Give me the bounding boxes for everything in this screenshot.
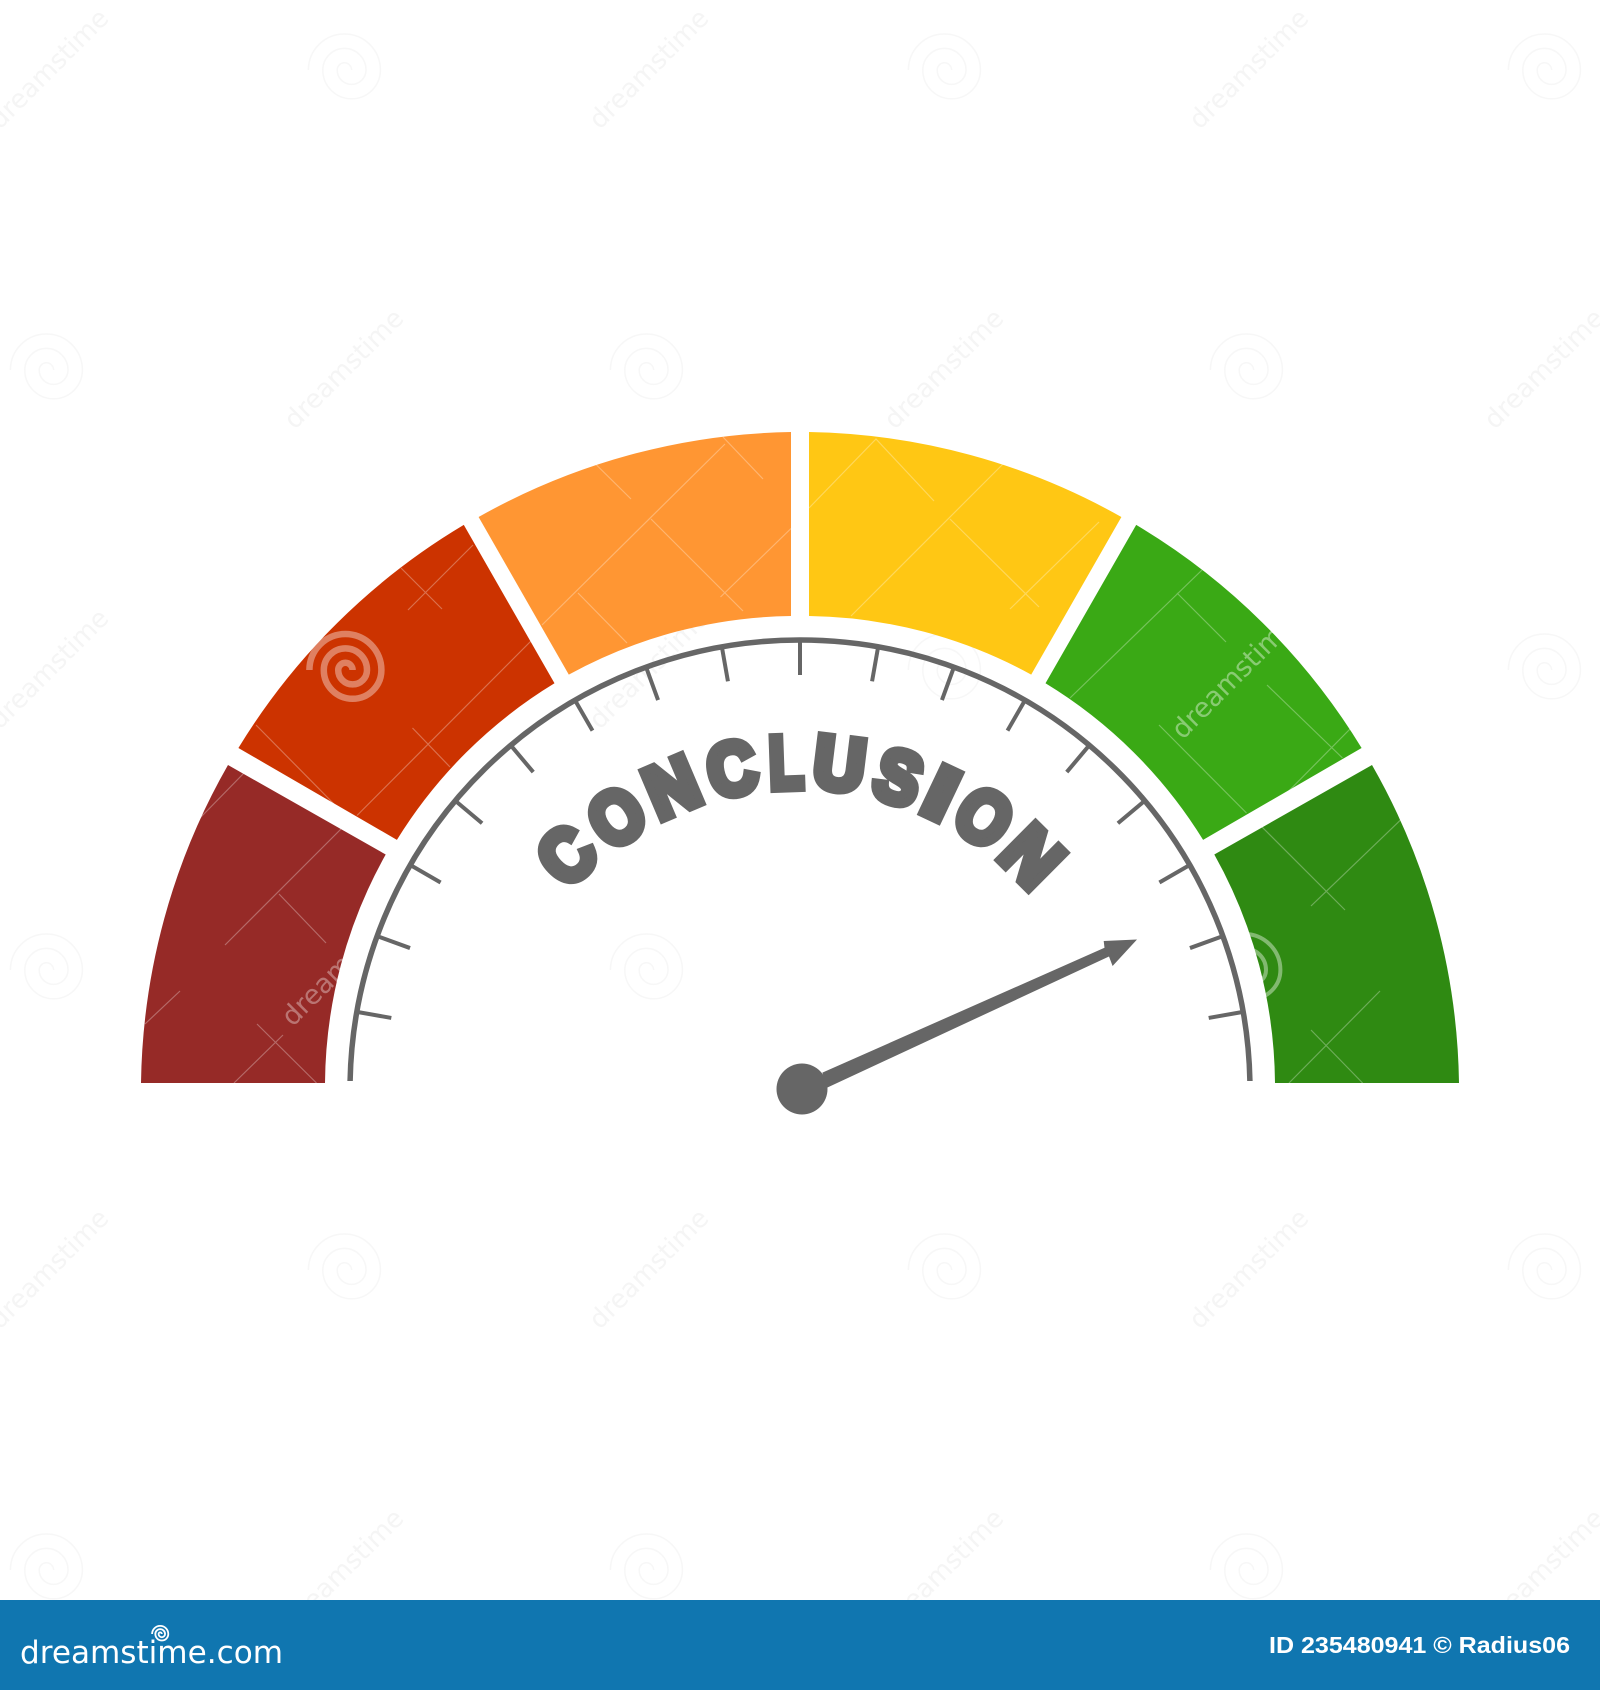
background watermark: dreamstime	[1184, 1204, 1315, 1335]
needle arrow	[822, 940, 1137, 1088]
curved title: CONCLUSION: I	[911, 750, 971, 837]
segment: dark red	[141, 765, 386, 1083]
needle with hub	[776, 940, 1137, 1114]
curved title: CONCLUSION: L	[768, 721, 804, 804]
curved title: CONCLUSION: N	[633, 740, 712, 836]
background watermark: dreamstime	[584, 1204, 715, 1335]
curved title: CONCLUSION: S	[865, 731, 932, 823]
footer logo text: dreamstime.com	[20, 1635, 283, 1671]
scale arc with tick marks	[350, 640, 1250, 1081]
segment: green	[1046, 525, 1362, 840]
footer bar	[0, 1600, 1600, 1690]
curved title: CONCLUSION: N	[985, 810, 1078, 904]
background watermark: dreamstime	[1184, 4, 1315, 135]
watermark over segments	[276, 609, 1302, 1032]
segment: yellow	[809, 432, 1121, 675]
background watermark: dreamstime	[584, 4, 715, 135]
background watermark: dreamstime	[279, 1504, 410, 1635]
curved title: CONCLUSION: C	[700, 723, 764, 814]
segment: dark green	[1214, 765, 1459, 1083]
footer logo spiral	[152, 1626, 168, 1640]
curved title: CONCLUSION: U	[809, 721, 870, 808]
segment: red	[238, 525, 554, 840]
background watermark: dreamstime	[879, 304, 1010, 435]
background watermark: dreamstime	[584, 604, 715, 735]
footer image id and credit: ID 235480941 © Radius06	[1269, 1632, 1570, 1658]
watermark over segments: dreamstime	[1166, 609, 1302, 745]
segment: orange	[479, 432, 791, 675]
curved title: CONCLUSION: C	[520, 809, 613, 902]
background watermark: dreamstime	[279, 304, 410, 435]
needle hub	[776, 1064, 828, 1114]
gauge colour segments	[141, 432, 1459, 1083]
watermark over segments: dreamstime	[276, 896, 412, 1032]
curved title: CONCLUSION: O	[940, 769, 1028, 866]
background watermark: dreamstime	[879, 1504, 1010, 1635]
curved title: CONCLUSION: O	[573, 769, 661, 866]
curved title: CONCLUSION	[520, 721, 1078, 904]
